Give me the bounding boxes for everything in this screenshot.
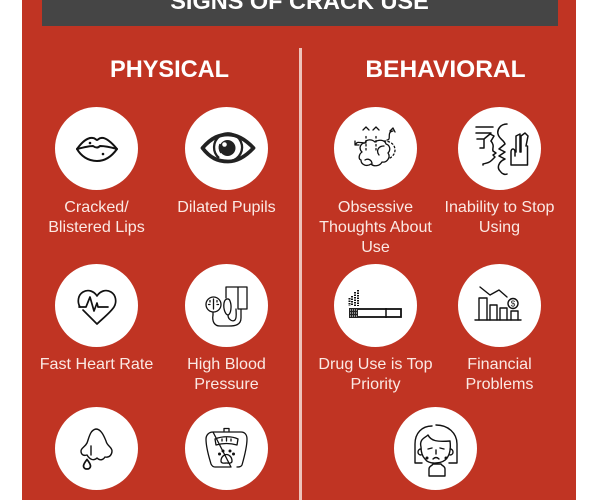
sign: cracked lips: Cracked/ <box>64 198 129 216</box>
sign: obsessive thoughts <box>319 107 432 256</box>
sign: financial problems <box>458 264 541 393</box>
sign: inability to stop: Inability to Stop <box>444 198 555 216</box>
sign: obsessive thoughts: Thoughts About <box>319 218 432 236</box>
sign: inability to stop: Using <box>479 218 520 236</box>
sign: dilated pupils: Dilated Pupils <box>177 198 276 216</box>
sign: weight loss <box>173 407 280 500</box>
heading: physical: PHYSICAL <box>110 56 229 83</box>
sign: inability to stop <box>444 107 555 236</box>
sign: nosebleeds <box>54 407 139 500</box>
sign: obsessive thoughts: Use <box>361 238 390 256</box>
sign: fast heart rate <box>40 264 153 373</box>
sign: high blood pressure: High Blood <box>187 355 266 373</box>
heading: behavioral: BEHAVIORAL <box>365 56 526 83</box>
sign: cracked lips <box>48 107 145 236</box>
sign: high blood pressure <box>185 264 268 393</box>
column divider <box>299 48 302 500</box>
sign: social problems <box>377 407 494 500</box>
title banner <box>42 0 558 26</box>
sign: financial problems: $ <box>511 300 516 308</box>
sign: financial problems: Financial <box>467 355 532 373</box>
sign: obsessive thoughts: Obsessive <box>338 198 413 216</box>
sign: high blood pressure: Pressure <box>194 375 259 393</box>
sign: drug use top priority <box>318 264 433 393</box>
sign: drug use top priority: Priority <box>350 375 401 393</box>
sign: cracked lips: Blistered Lips <box>48 218 145 236</box>
sign: fast heart rate: Fast Heart Rate <box>40 355 153 373</box>
sign: financial problems: Problems <box>466 375 533 393</box>
sign: drug use top priority: Drug Use is Top <box>318 355 433 373</box>
sign: dilated pupils <box>177 107 276 216</box>
